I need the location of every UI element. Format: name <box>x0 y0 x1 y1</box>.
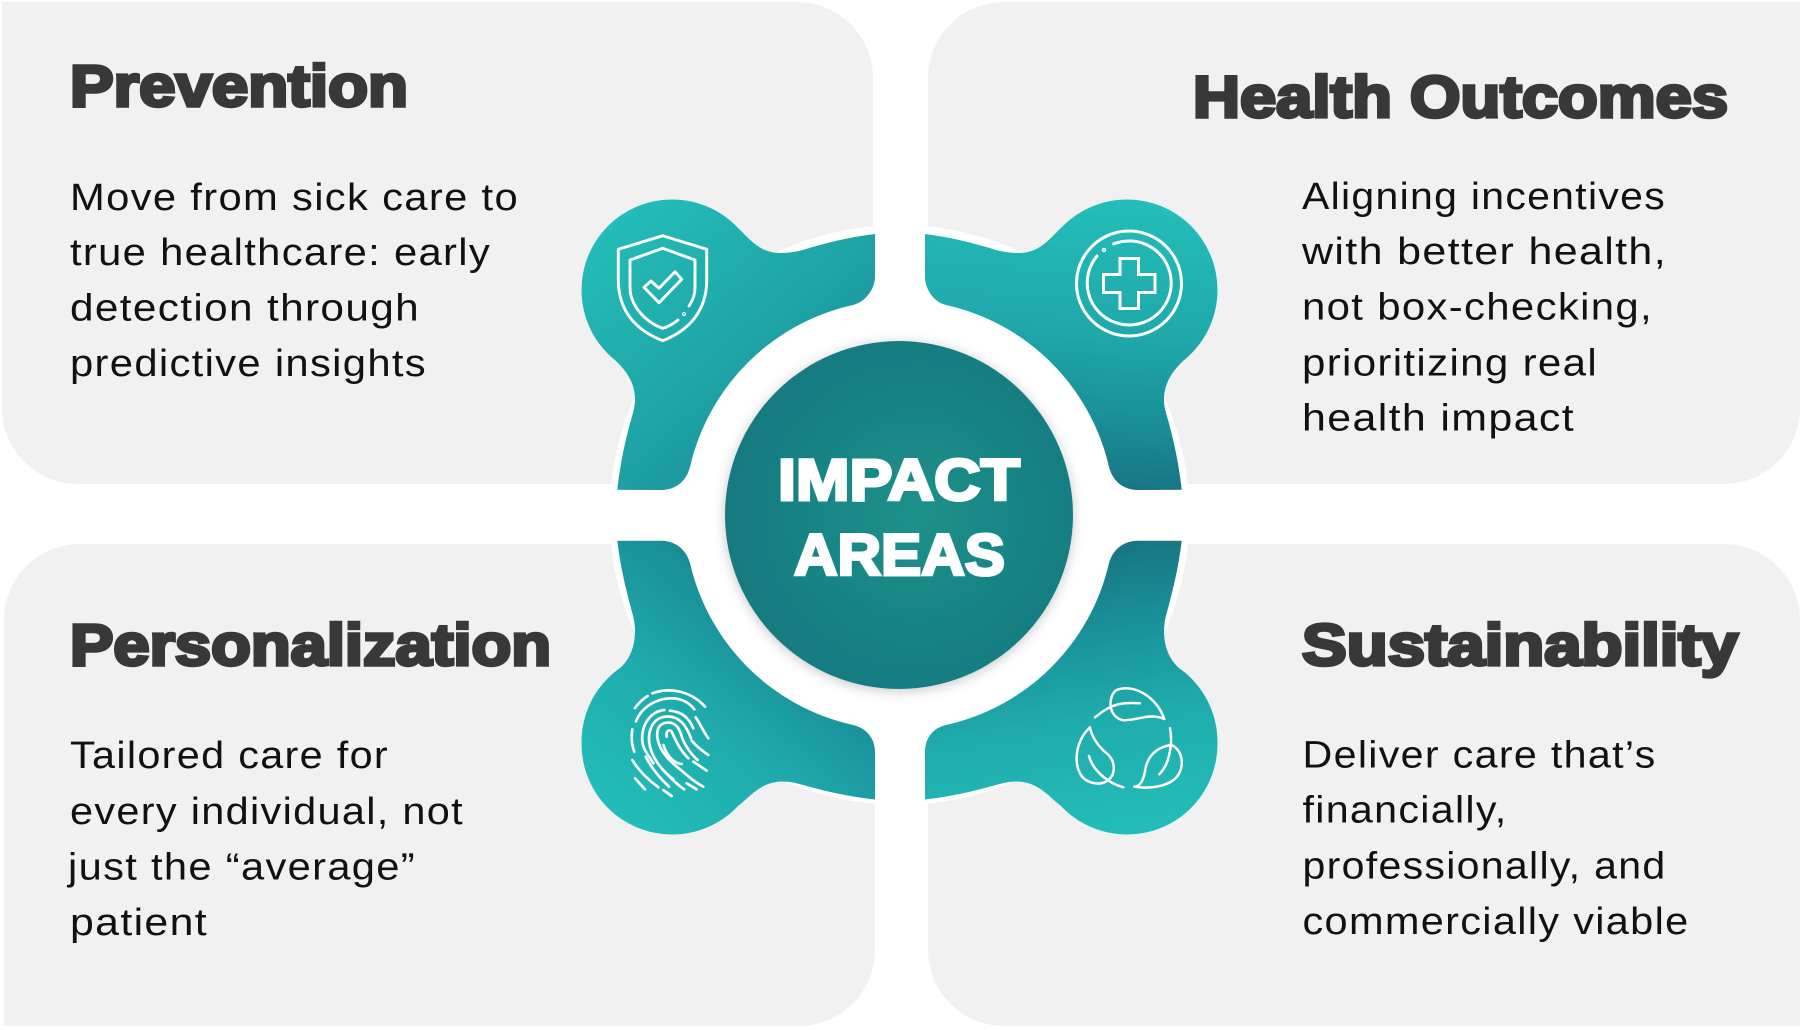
heading: sustainability: Sustainability <box>1302 613 1738 678</box>
text block: personalization: patient <box>70 902 208 944</box>
panel: prevention <box>2 2 873 484</box>
shape: bottom-right connector <box>925 541 1218 835</box>
text block: prevention: Move from sick care to <box>70 177 519 219</box>
heading: health outcomes: Health Outcomes <box>1193 65 1728 130</box>
text block: prevention: predictive insights <box>70 343 427 385</box>
shape: top-left connector <box>582 199 875 490</box>
panel: sustainability <box>928 544 1800 1026</box>
center title <box>778 448 1020 588</box>
text block: prevention: detection through <box>70 288 420 330</box>
text block: sustainability: financially, <box>1302 790 1508 832</box>
center circle <box>725 341 1073 689</box>
text block: health outcomes: health impact <box>1302 398 1575 440</box>
text block: personalization: every individual, not <box>70 791 464 833</box>
text block: health outcomes: not box-checking, <box>1302 286 1653 328</box>
text block: sustainability: commercially viable <box>1302 901 1690 943</box>
text block: sustainability <box>1302 734 1690 943</box>
text block: prevention: true healthcare: early <box>70 232 491 274</box>
text block: personalization: Tailored care for <box>70 735 389 777</box>
center title: AREAS <box>794 523 1005 588</box>
shape: top-right connector <box>925 199 1218 490</box>
text block: sustainability: professionally, and <box>1302 846 1666 888</box>
shape: bottom-left connector <box>581 541 875 835</box>
icon: shield with check <box>618 236 707 341</box>
heading: prevention: Prevention <box>70 54 408 119</box>
text block: health outcomes <box>1301 176 1667 440</box>
text block: sustainability: Deliver care that’s <box>1302 734 1656 776</box>
text block: prevention <box>70 177 519 385</box>
text block: health outcomes: prioritizing real <box>1302 342 1598 384</box>
panel: health outcomes <box>928 2 1800 484</box>
text block: personalization <box>67 735 464 944</box>
center title: IMPACT <box>778 448 1020 513</box>
heading: personalization: Personalization <box>70 613 551 678</box>
icon: fingerprint <box>632 690 708 796</box>
text block: health outcomes: Aligning incentives <box>1302 176 1666 218</box>
icon: recycling leaves <box>1077 688 1182 788</box>
panel: personalization <box>4 544 875 1026</box>
icon: medical cross <box>1076 231 1182 336</box>
text block: health outcomes: with better health, <box>1301 231 1667 273</box>
text block: personalization: just the “average” <box>67 846 416 888</box>
